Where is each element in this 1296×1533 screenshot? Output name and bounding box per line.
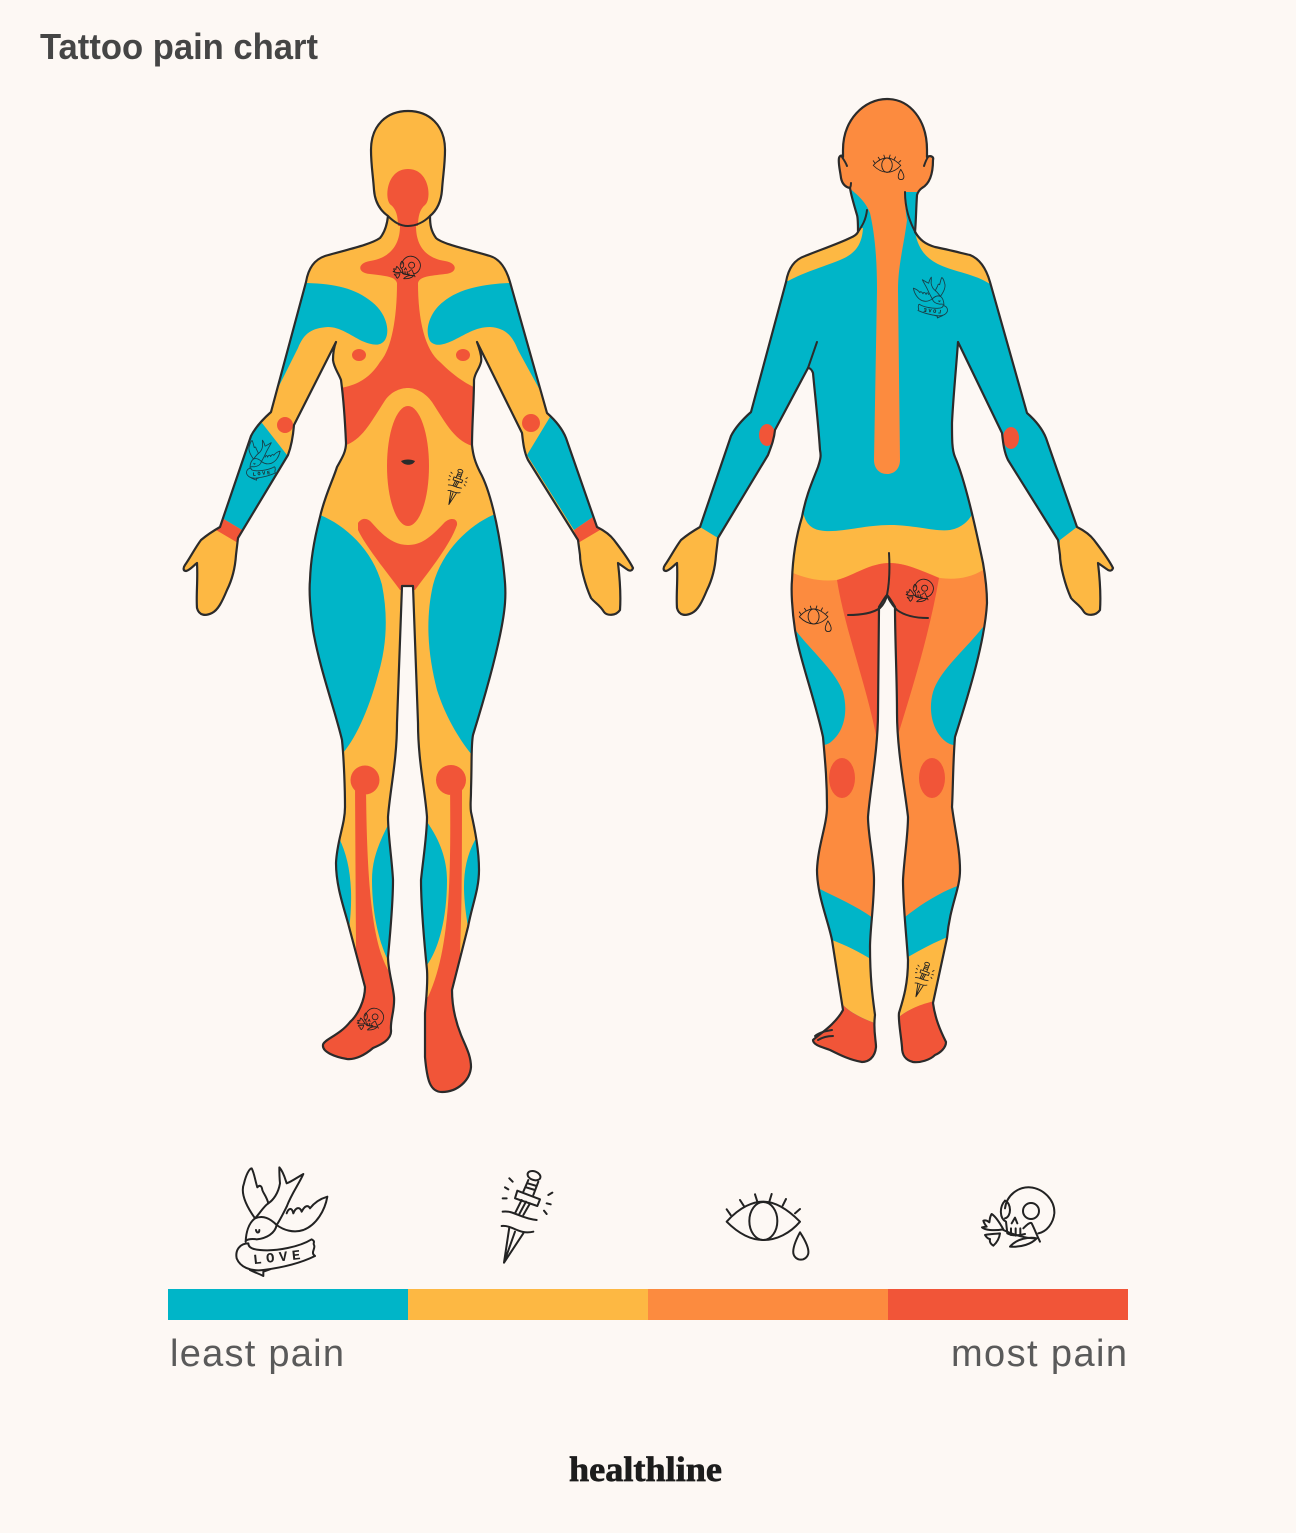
small skull tattoo on chest <box>393 256 420 279</box>
back knee spots <box>829 758 945 798</box>
icon: crying eye tattoo <box>727 1194 808 1260</box>
chin line <box>388 216 430 226</box>
front nipple spots <box>352 349 470 361</box>
back hands yellow <box>664 528 1112 614</box>
back elbow spots <box>759 424 1019 449</box>
front right shoulder teal zone <box>428 283 540 390</box>
back pain zones <box>664 100 1112 1062</box>
small bird tattoo on forearm <box>247 440 280 480</box>
back waist yellow band <box>794 514 983 580</box>
back head and spine orange <box>840 100 932 474</box>
front pain zones <box>170 100 650 1100</box>
front left leg calves teal <box>337 826 392 958</box>
front body outline <box>184 111 633 1092</box>
small eye tattoo on thigh <box>799 606 831 632</box>
small bird tattoo on shoulder <box>913 277 947 318</box>
navel <box>401 460 415 465</box>
title: Tattoo pain chart <box>40 26 318 67</box>
back shoulder yellow right <box>916 235 990 284</box>
small skull tattoo on buttock <box>906 579 933 602</box>
front face and neck red zone <box>387 169 429 226</box>
back right foot red <box>900 1002 945 1062</box>
healthline logo: healthline <box>569 1450 722 1489</box>
front right knee and shin red <box>426 765 470 1091</box>
front body figure <box>170 100 650 1100</box>
legend label: least pain: least pain <box>170 1333 344 1375</box>
back buttock and inner thigh red <box>837 563 939 735</box>
back right ankle yellow <box>900 938 946 1016</box>
small skull tattoo on foot <box>357 1008 384 1030</box>
front groin red zone <box>358 519 457 590</box>
back contour lines <box>808 157 928 1040</box>
back left ankle yellow <box>833 940 874 1022</box>
front elbow spots <box>277 414 540 433</box>
front left forearm teal <box>224 423 287 530</box>
back body outline <box>664 99 1113 1062</box>
back shoulder yellow left <box>787 228 863 281</box>
back left foot red <box>814 1005 875 1061</box>
front left thigh teal <box>310 516 386 752</box>
back thigh teal right <box>930 627 983 745</box>
front belly red oval <box>387 406 429 526</box>
front right leg calves teal <box>422 823 478 964</box>
front wrist bands <box>216 517 600 543</box>
small dagger tattoo on hip <box>448 469 467 505</box>
front left shoulder teal zone <box>279 283 388 386</box>
legend label: most pain: most pain <box>951 1333 1127 1375</box>
front chest and ribs red zone <box>340 226 476 447</box>
front left knee and shin red <box>324 766 393 1058</box>
small eye tattoo on head <box>873 155 904 180</box>
back thigh teal left <box>796 631 846 745</box>
pain scale bar <box>168 1289 1128 1320</box>
back neck teal right <box>916 236 917 237</box>
icon: dagger tattoo <box>502 1169 552 1263</box>
small dagger tattoo on calf <box>915 962 934 997</box>
back lower body orange <box>792 563 986 917</box>
front right forearm teal <box>527 417 592 530</box>
front right thigh teal <box>428 515 504 754</box>
icon: skull and flower tattoo, most pain <box>982 1187 1054 1247</box>
back body figure <box>650 90 1130 1090</box>
icon: bird tattoo, least pain <box>236 1167 327 1276</box>
